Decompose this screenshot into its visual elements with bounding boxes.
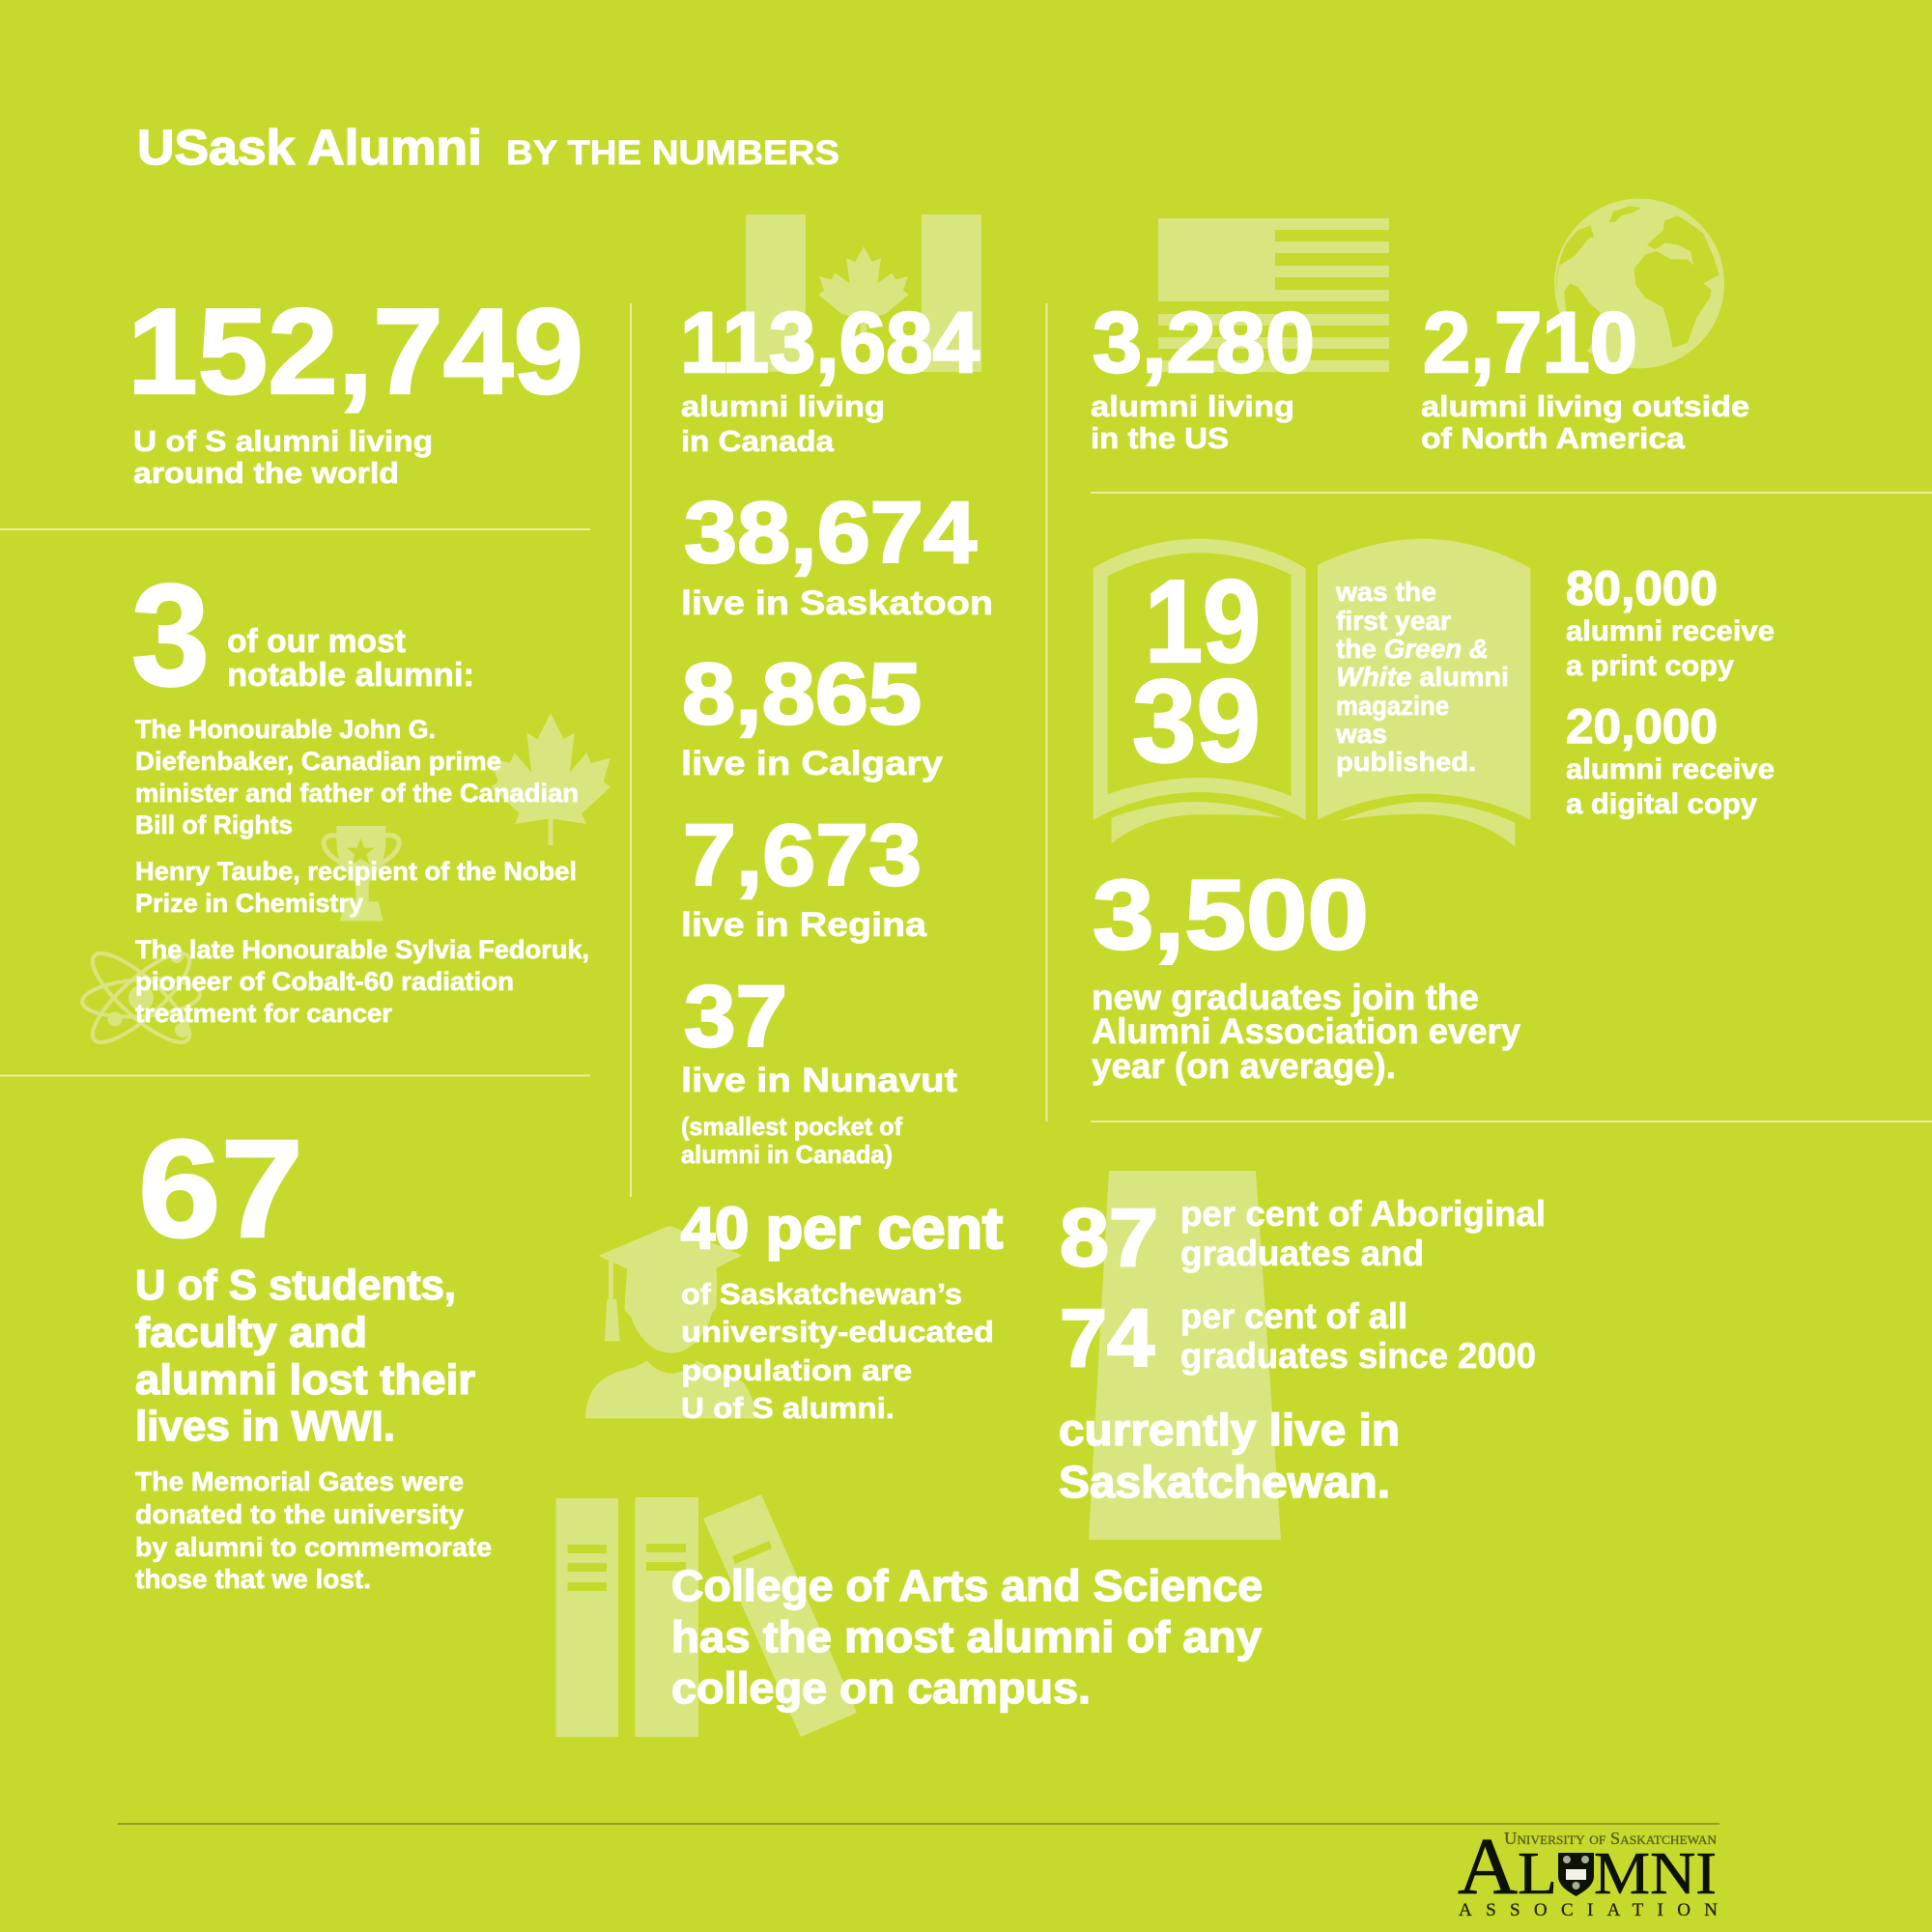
text: College of Arts and Science: College of Arts and Science: [671, 1561, 1263, 1610]
logo: University of Saskatchewan Alumni Association: A: [1458, 1822, 1518, 1912]
stat: alumni in the US: in the US: [1091, 421, 1229, 455]
stats: alumni in Canada: 7,673: [683, 808, 922, 904]
stat: new graduates: 3,500: [1093, 860, 1369, 970]
icon: maple leaf: [491, 713, 611, 845]
stat: 40 per cent: of Saskatchewan’s: [681, 1277, 962, 1311]
stats: alumni in Canada: in Canada: [681, 424, 835, 458]
stat: total alumni: U of S alumni living: [133, 424, 433, 458]
stat: graduates in Saskatchewan: per cent of all: [1180, 1296, 1407, 1336]
text: College of Arts and Science: college on campus.: [671, 1663, 1091, 1713]
icon: books: [556, 1494, 857, 1737]
stats: alumni in Canada: live in Saskatoon: [681, 584, 993, 622]
icon: Canadian flag: [746, 214, 981, 372]
stats: magazine circulation: 80,000: [1566, 561, 1718, 615]
stat: new graduates: Alumni Association every: [1092, 1011, 1520, 1051]
icon: open book: [1094, 539, 1530, 847]
stats: magazine circulation: alumni receive: [1566, 753, 1775, 785]
stat: graduates in Saskatchewan: Saskatchewan.: [1059, 1457, 1390, 1507]
panel: notable alumni: The late Honourable Sylvia Fedoruk,: [135, 935, 589, 964]
panel: notable alumni: treatment for cancer: [135, 999, 392, 1028]
panel: WWI memorial: those that we lost.: [135, 1564, 371, 1594]
panel: WWI memorial: The Memorial Gates were: [135, 1466, 464, 1496]
stats: alumni in Canada: live in Regina: [681, 906, 927, 944]
logo: University of Saskatchewan Alumni Association: University of Saskatchewan: [1504, 1829, 1718, 1848]
text: 1939 on book page: [1132, 555, 1261, 786]
icon: atom: [81, 942, 201, 1054]
stats: alumni in Canada: 38,674: [684, 485, 977, 582]
logo: University of Saskatchewan Alumni Association: [1458, 1822, 1718, 1920]
stat: graduates in Saskatchewan: per cent of Aboriginal: [1180, 1194, 1546, 1234]
stat: alumni outside North America: [1421, 294, 1749, 455]
stats: alumni in Canada: live in Calgary: [681, 745, 944, 782]
stats: magazine circulation: [1566, 561, 1775, 820]
stat: 40 per cent: U of S alumni.: [681, 1391, 895, 1425]
stat: graduates in Saskatchewan: graduates since 2000: [1180, 1336, 1536, 1376]
title: BY THE NUMBERS: [506, 134, 839, 172]
logo: University of Saskatchewan Alumni Association: MNI: [1594, 1841, 1717, 1907]
text: magazine history: White alumni: [1336, 662, 1509, 692]
icon: graduate silhouette: [585, 1226, 757, 1418]
text: magazine history: published.: [1336, 747, 1476, 777]
panel: WWI memorial: lives in WWI.: [135, 1403, 395, 1450]
text: College of Arts and Science: has the most alumni of any: [671, 1612, 1262, 1662]
panel: WWI memorial: donated to the university: [135, 1499, 464, 1529]
text: magazine history: magazine: [1336, 691, 1449, 721]
stats: alumni in Canada: 8,865: [682, 646, 922, 743]
text: 1939 on book page: 19: [1145, 555, 1261, 687]
stat: alumni outside North America: of North America: [1421, 421, 1686, 455]
panel: notable alumni: [131, 554, 589, 1028]
panel: notable alumni: of our most: [227, 623, 406, 660]
stats: alumni in Canada: (smallest pocket of: [681, 1112, 902, 1141]
stat: total alumni: [128, 283, 583, 490]
panel: WWI memorial: [135, 1111, 492, 1594]
panel: WWI memorial: alumni lost their: [135, 1356, 475, 1404]
stat: new graduates: [1092, 860, 1520, 1086]
panel: notable alumni: Bill of Rights: [135, 810, 293, 839]
panel: WWI memorial: by alumni to commemorate: [135, 1532, 492, 1562]
logo: University of Saskatchewan Alumni Association: ASSOCIATION: [1459, 1900, 1718, 1920]
stat: new graduates: new graduates join the: [1092, 978, 1479, 1017]
text: magazine history: [1335, 577, 1509, 777]
stat: 40 per cent: population are: [681, 1353, 912, 1387]
stat: 40 per cent: 40 per cent: [681, 1196, 1003, 1261]
stat: alumni outside North America: alumni living outside: [1421, 389, 1749, 423]
stat: new graduates: year (on average).: [1092, 1046, 1396, 1086]
panel: notable alumni: notable alumni:: [227, 657, 474, 694]
stats: magazine circulation: a print copy: [1566, 650, 1734, 682]
stats: alumni in Canada: [680, 294, 993, 1169]
panel: WWI memorial: 67: [138, 1111, 303, 1266]
stat: alumni in the US: [1091, 294, 1315, 455]
stat: alumni in the US: alumni living: [1091, 389, 1294, 423]
stats: alumni in Canada: 113,684: [680, 294, 980, 390]
title: [137, 120, 839, 175]
stats: alumni in Canada: live in Nunavut: [681, 1062, 957, 1099]
logo: University of Saskatchewan Alumni Association: L: [1518, 1841, 1557, 1907]
panel: notable alumni: Henry Taube, recipient of the Nobel: [135, 857, 577, 886]
text: magazine history: first year: [1336, 606, 1451, 636]
stat: 40 per cent: university-educated: [681, 1315, 994, 1349]
icon: trophy: [324, 826, 399, 921]
stats: magazine circulation: a digital copy: [1566, 788, 1757, 820]
stat: alumni outside North America: 2,710: [1423, 294, 1637, 390]
stat: 40 per cent: [681, 1196, 1003, 1425]
stats: alumni in Canada: alumni in Canada): [681, 1140, 893, 1169]
panel: notable alumni: Diefenbaker, Canadian prime: [135, 747, 501, 776]
panel: WWI memorial: faculty and: [135, 1309, 367, 1356]
text: 1939 on book page: 39: [1132, 655, 1261, 786]
panel: notable alumni: Prize in Chemistry: [135, 889, 363, 918]
stat: graduates in Saskatchewan: 87: [1060, 1192, 1158, 1283]
text: magazine history: was: [1335, 719, 1387, 749]
text: magazine history: was the: [1335, 577, 1436, 607]
stat: total alumni: around the world: [133, 456, 399, 490]
stat: graduates in Saskatchewan: currently live in: [1059, 1405, 1400, 1455]
icon: US flag: [1158, 218, 1389, 372]
icon: globe: [1554, 199, 1724, 369]
panel: notable alumni: The Honourable John G.: [135, 715, 436, 744]
stats: alumni in Canada: alumni living: [681, 389, 885, 423]
panel: notable alumni: 3: [131, 554, 210, 716]
stats: magazine circulation: 20,000: [1566, 699, 1718, 753]
title: USask Alumni: [137, 120, 482, 175]
panel: notable alumni: minister and father of the Canadian: [135, 779, 579, 808]
stat: total alumni: 152,749: [128, 283, 583, 419]
stat: graduates in Saskatchewan: graduates and: [1180, 1234, 1424, 1273]
stats: alumni in Canada: 37: [684, 969, 787, 1065]
text: College of Arts and Science: [671, 1561, 1263, 1713]
stat: graduates in Saskatchewan: 74: [1060, 1293, 1154, 1383]
panel: WWI memorial: U of S students,: [135, 1262, 456, 1309]
icon: memorial gate tower: [1089, 1171, 1281, 1540]
stat: graduates in Saskatchewan: [1059, 1192, 1546, 1507]
stat: alumni in the US: 3,280: [1093, 294, 1315, 390]
text: magazine history: the Green &: [1336, 634, 1489, 664]
panel: notable alumni: pioneer of Cobalt-60 radiation: [135, 967, 514, 996]
stats: magazine circulation: alumni receive: [1566, 615, 1775, 647]
